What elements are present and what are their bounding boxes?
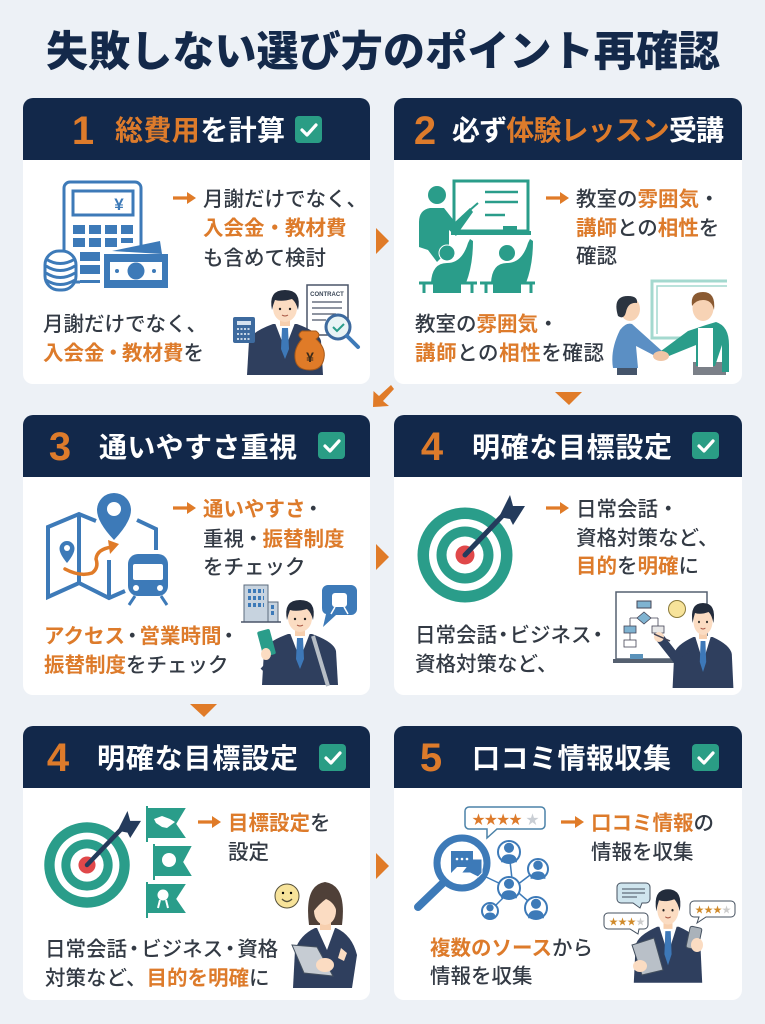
arrow xyxy=(546,502,569,514)
icon: businessman with contract: ¥ xyxy=(306,349,314,365)
header: 3: 通いやすさ重視 xyxy=(99,432,297,463)
text block: bottom xyxy=(430,937,593,988)
text block: bottom xyxy=(415,313,604,365)
header: 4 (second): 明確な目標設定 xyxy=(97,743,298,774)
icon: map and train xyxy=(48,493,168,605)
text block: top: 重視・振替制度 xyxy=(203,528,344,551)
illustration: man with tablet and review bubbles: ★★★★ xyxy=(609,917,645,927)
arrow xyxy=(198,816,221,828)
text block: bottom: アクセス・営業時間・ xyxy=(44,625,239,648)
text block: top: 入会金・教材費 xyxy=(203,217,346,240)
illustration: man with tablet and review bubbles: ★★★★ xyxy=(695,905,731,915)
icon: magnifier with network: ★ xyxy=(526,812,539,827)
text block: bottom: 日常会話・ビジネス・資格 xyxy=(45,938,279,961)
arrow xyxy=(173,502,196,514)
panel: 2 trial lesson xyxy=(394,98,742,384)
connector: 2 to 3 diagonal xyxy=(373,385,394,407)
text block: top xyxy=(228,812,330,864)
text block: bottom xyxy=(415,624,608,676)
header: 3 xyxy=(23,415,370,477)
illustration: handshake xyxy=(612,281,729,375)
icon: target with flags xyxy=(44,806,190,918)
text block: bottom: 月謝だけでなく、 xyxy=(43,313,207,336)
text block: bottom: 資格対策など、 xyxy=(415,653,557,676)
text block: bottom: 日常会話・ビジネス・ xyxy=(415,624,608,647)
header: 5: 5 xyxy=(420,736,442,780)
header: 4 (second) xyxy=(23,726,370,788)
illustration: man with tablet and review bubbles xyxy=(604,883,735,983)
panel: 1 total cost xyxy=(23,98,370,384)
text block: bottom xyxy=(45,938,279,990)
text block: top: 情報を収集 xyxy=(591,841,694,864)
text block: top: 目的を明確に xyxy=(576,555,699,578)
icon: calculator and money xyxy=(45,182,168,290)
illustration: commuter with building and train bubble xyxy=(241,585,357,686)
header: 5 xyxy=(394,726,742,788)
header: 4: 4 xyxy=(421,425,444,469)
text block: top: 月謝だけでなく、 xyxy=(203,188,367,211)
header: 4 xyxy=(394,415,742,477)
text block: bottom: 複数のソースから xyxy=(430,937,593,960)
icon: calculator and money: ¥ xyxy=(114,195,124,214)
illustration: presenter at whiteboard xyxy=(613,592,733,688)
text block: top xyxy=(203,188,367,270)
panel: 6 reviews xyxy=(394,726,742,1000)
text block: bottom: 対策など、目的を明確に xyxy=(45,967,269,990)
text block: top: 目標設定を xyxy=(228,812,330,835)
header: 1: 総費用を計算 xyxy=(115,115,285,146)
text block: top: も含めて検討 xyxy=(203,247,326,270)
illustration: businesswoman with tablet xyxy=(275,882,357,988)
icon: classroom xyxy=(419,181,535,293)
text block: bottom: 振替制度をチェック xyxy=(44,654,228,677)
text block: top: 確認 xyxy=(576,245,617,268)
header: 1 xyxy=(23,98,370,160)
header: 4 (second): 4 xyxy=(47,736,70,780)
icon: target xyxy=(418,495,525,602)
arrow xyxy=(173,192,196,204)
text block: bottom xyxy=(43,313,207,365)
title: 失敗しない選び方のポイント再確認 xyxy=(46,28,720,75)
text block: top xyxy=(576,498,718,578)
text block: top: 設定 xyxy=(228,841,269,864)
text block: top: をチェック xyxy=(203,556,306,579)
text block: top: 資格対策など、 xyxy=(576,527,718,550)
panel: 4 clear goals xyxy=(394,415,742,695)
connector: 5 to 6 xyxy=(376,853,389,879)
text block: bottom xyxy=(44,625,239,677)
header: 2 xyxy=(394,98,742,160)
header: 2: 2 xyxy=(414,109,436,153)
text block: bottom: 入会金・教材費を xyxy=(43,342,204,365)
text block: top xyxy=(203,498,344,579)
connector: 2 to 4 down xyxy=(555,392,582,405)
connector: 3 to next row xyxy=(190,704,217,717)
header: 5: 口コミ情報収集 xyxy=(472,743,671,774)
icon: magnifier with network xyxy=(418,807,548,919)
text block: top xyxy=(591,812,714,864)
panel: 5 goal setting xyxy=(23,726,370,1000)
connector: 1 to 2 xyxy=(376,228,389,254)
text block: top: 教室の雰囲気・ xyxy=(576,188,720,211)
icon: businessman with contract: CONTRACT xyxy=(310,292,344,298)
text block: top xyxy=(576,188,720,268)
text block: top: 講師との相性を xyxy=(576,217,719,240)
arrow xyxy=(546,192,569,204)
text block: bottom: 情報を収集 xyxy=(430,965,532,988)
text block: top: 通いやすさ・ xyxy=(203,498,324,521)
header: 2: 必ず体験レッスン受講 xyxy=(452,115,724,146)
text block: top: 日常会話・ xyxy=(576,498,678,521)
text block: bottom: 講師との相性を確認 xyxy=(415,342,604,365)
icon: magnifier with network: ★★★★ xyxy=(472,812,522,827)
panel: 3 access xyxy=(23,415,370,695)
arrow xyxy=(561,816,584,828)
text block: bottom: 教室の雰囲気・ xyxy=(415,313,558,336)
text block: top: 口コミ情報の xyxy=(591,812,714,835)
icon: businessman with contract xyxy=(233,285,358,375)
connector: 3 to 4 xyxy=(376,544,389,570)
header: 3: 3 xyxy=(49,425,71,469)
header: 4: 明確な目標設定 xyxy=(472,432,672,463)
header: 1: 1 xyxy=(72,109,94,153)
